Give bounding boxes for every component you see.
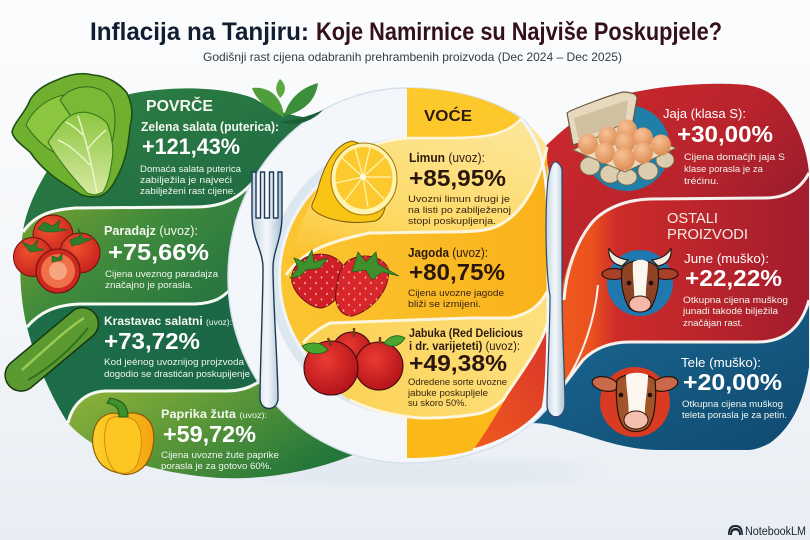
text block: jabuka: su skoro 50%.: [408, 398, 467, 409]
text block: paprika: [161, 407, 279, 472]
title: Inflacija na Tanjiru:: [90, 18, 309, 46]
text block: tele: Otkupna cijena muškog: [682, 399, 783, 410]
text block: krastavac: Krastavac salatni (uvoz):: [104, 314, 232, 328]
text block: jagoda: bliži se izmijeni.: [408, 299, 481, 310]
text block: zelena salata: [140, 120, 279, 197]
text: jaja i ostali proizvodi: [663, 106, 788, 421]
text block: jagoda: [408, 246, 505, 310]
heading: ostali proizvodi: OSTALI: [667, 210, 718, 227]
subtitle: Godišnji rast cijena odabranih prehrambenih proizvoda (Dec 2024 – Dec 2025): [203, 50, 622, 64]
icon: lettuce: [12, 74, 132, 197]
text block: june: Otkupna cijena muškog: [683, 295, 788, 306]
text block: jabuka: Jabuka (Red Delicious: [409, 328, 523, 340]
text block: tele: +20,00%: [683, 369, 782, 395]
panel: povrće (green half): [20, 88, 365, 478]
text block: paradajz: Paradajz (uvoz):: [104, 224, 198, 238]
text block: zelena salata: +121,43%: [142, 134, 240, 159]
text block: limun: +85,95%: [409, 165, 506, 191]
text block: krastavac: +73,72%: [104, 328, 200, 354]
panel: limun background: [288, 120, 547, 270]
text block: jagoda: +80,75%: [409, 259, 505, 285]
heading: povrće: POVRČE: [146, 96, 213, 115]
panel: krastavac background: [27, 290, 320, 423]
text block: tele: Tele (muško):: [681, 355, 761, 370]
text block: jabuka: [407, 328, 523, 409]
title: Koje Namirnice su Najviše Poskupjele?: [316, 18, 722, 46]
panel: zelena salata background: [23, 88, 320, 232]
text block: limun: [408, 151, 511, 227]
text block: june: [682, 251, 788, 329]
icon: lemon: [312, 141, 397, 222]
icon: tomatoes: [14, 215, 100, 293]
text block: paprika: Cijena uvozne žute paprike: [161, 450, 279, 461]
text block: june: +22,22%: [685, 265, 782, 291]
text block: krastavac: dogodio se drastićan poskupijenje: [104, 369, 250, 380]
text block: jagoda: Jagoda (uvoz):: [408, 246, 488, 260]
text block: paprika: +59,72%: [163, 421, 256, 447]
panel: paprika background: [68, 383, 365, 478]
plate: [228, 88, 552, 463]
text block: june: June (muško):: [684, 251, 769, 266]
text block: paradajz: [104, 224, 219, 291]
text block: jabuka: +49,38%: [409, 350, 507, 376]
logo: notebooklm: NotebookLM: [745, 526, 806, 538]
icon: apples: [302, 328, 405, 395]
panel: tele background: [528, 300, 809, 450]
plate: red crescent: [473, 325, 548, 450]
icon: bull head: [602, 248, 678, 316]
text block: jabuka: i dr. varijeteti) (uvoz):: [409, 341, 520, 353]
text block: paradajz: +75,66%: [108, 239, 209, 265]
icon: calf head: [591, 367, 679, 437]
text block: jaja: [663, 106, 785, 187]
text block: jaja: tréćinu.: [684, 176, 719, 187]
text block: zelena salata: Domaća salata puterica: [140, 164, 242, 175]
icon: strawberries: [290, 250, 399, 316]
title: [90, 18, 722, 46]
heading: ostali proizvodi: [667, 210, 748, 243]
panel: ostali proizvodi (red and blue half): [528, 84, 809, 450]
icon: knife: [546, 162, 565, 417]
text: voće: [407, 107, 523, 409]
text: povrće: [104, 96, 279, 472]
text block: limun: Uvozni limun drugi je: [408, 194, 510, 205]
heading: ostali proizvodi: PROIZVODI: [667, 226, 748, 243]
heading: voće: VOĆE: [424, 107, 472, 125]
text block: jaja: Cijena domačjh jaja S: [684, 152, 785, 163]
text block: june: značájan rast.: [683, 318, 743, 329]
text block: jaja: klase porasla je za: [684, 164, 764, 175]
panel: jagoda background: [286, 147, 548, 343]
text block: jaja: Jaja (klasa S):: [663, 106, 746, 121]
text block: jabuka: Odredene sorte uvozne: [408, 377, 507, 388]
text block: paradajz: značajno je porasla.: [105, 280, 193, 291]
text block: krastavac: Kod jeénog uvoznijog projzvoda: [104, 357, 245, 368]
text block: june: junadi takodé bilježila: [682, 306, 779, 317]
text block: tele: teleta porasla je za petin.: [682, 410, 787, 421]
icon: yellow pepper: [93, 398, 154, 475]
plate: yellow half: [407, 88, 548, 458]
icon: cucumber: [0, 301, 105, 398]
panel: jabuka background: [303, 292, 548, 418]
logo: notebooklm: [728, 525, 806, 538]
text block: paprika: porasla je za gotovo 60%.: [161, 461, 272, 472]
icon: fork: [252, 172, 282, 408]
text block: limun: stopi poskupljenja.: [408, 216, 496, 227]
text block: krastavac: [104, 314, 250, 380]
text block: jaja: +30,00%: [677, 121, 773, 147]
text block: paradajz: Cijena uveznog paradajza: [105, 269, 219, 280]
text block: zelena salata: zabilježeni rast cijene.: [140, 186, 236, 197]
text block: tele: [681, 355, 787, 421]
text block: limun: Limun (uvoz):: [409, 151, 485, 165]
icon: egg carton: [567, 92, 676, 191]
text block: limun: na listi po zabilježenoj: [408, 205, 511, 216]
text block: zelena salata: Zelena salata (puterica):: [141, 120, 279, 134]
text block: zelena salata: zabilježila je najveći: [140, 175, 232, 186]
text block: jagoda: Cijena uvozne jagode: [408, 288, 504, 299]
text block: jabuka: jabuke poskupljele: [407, 388, 488, 399]
panel: june background: [530, 173, 809, 420]
panel: paradajz background: [20, 180, 320, 327]
text block: paprika: Paprika žuta (uvoz):: [161, 407, 267, 421]
panel: jaja background: [530, 84, 809, 300]
icon: green leaves: [252, 79, 323, 124]
